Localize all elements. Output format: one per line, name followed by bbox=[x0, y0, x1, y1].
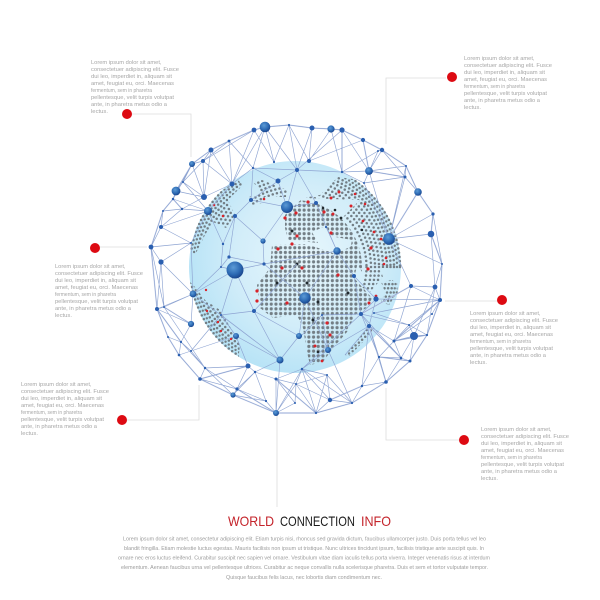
connector: top right bbox=[386, 78, 446, 144]
text block: middle right: pellentesque, velit turpis volutpat bbox=[470, 346, 553, 352]
network nodes: large spheres bbox=[172, 122, 422, 416]
body paragraph: Quisque faucibus felis lacus, nec lobortis diam condimentum nec. bbox=[226, 575, 382, 581]
text block: middle right: amet, feugiat eu, orci. Maecenas bbox=[470, 332, 553, 338]
text block: middle left: fermentum, sem in pharetra bbox=[55, 292, 117, 298]
text block: top left: ante, in pharetra metus odio a bbox=[91, 102, 168, 108]
network lines bbox=[151, 125, 442, 413]
text block: top left: pellentesque, velit turpis volutpat bbox=[91, 95, 174, 101]
connector: middle left bbox=[100, 246, 147, 248]
text block: middle left: dui leo, imperdiet in, aliquam sit bbox=[55, 278, 136, 284]
globe bbox=[189, 161, 401, 373]
title: WORLD bbox=[228, 513, 274, 529]
text block: top right: consectetuer adipiscing elit. Fusce bbox=[464, 63, 552, 69]
network lines: outer web underlay bbox=[151, 125, 442, 413]
body paragraph: ornare nec eros luctus eleifend. Curabitur suscipit nec sapien vel ornare. Vestibulum vitae diam iaculis tellus porta viverra. Integer venenatis risus at interdum bbox=[118, 556, 490, 562]
connector: top left bbox=[132, 114, 191, 157]
text block: middle right: dui leo, imperdiet in, aliquam sit bbox=[470, 325, 551, 331]
connector: bottom left bbox=[127, 385, 199, 420]
text block: middle right: ante, in pharetra metus odio a bbox=[470, 353, 547, 359]
connection network bbox=[149, 122, 443, 416]
text block: middle right: consectetuer adipiscing elit. Fusce bbox=[470, 318, 558, 324]
marker: middle right bbox=[497, 295, 507, 305]
text block: top right: Lorem ipsum dolor sit amet, bbox=[464, 56, 535, 62]
text block: bottom left: pellentesque, velit turpis volutpat bbox=[21, 417, 104, 423]
text block: top left: consectetuer adipiscing elit. Fusce bbox=[91, 67, 179, 73]
text block: middle left: Lorem ipsum dolor sit amet, bbox=[55, 264, 126, 270]
text block: bottom left: dui leo, imperdiet in, aliquam sit bbox=[21, 396, 102, 402]
text block: middle left bbox=[55, 264, 143, 319]
text block: top right: amet, feugiat eu, orci. Maecenas bbox=[464, 77, 547, 83]
text block: bottom left: Lorem ipsum dolor sit amet, bbox=[21, 382, 92, 388]
text block: bottom right: consectetuer adipiscing elit. Fusce bbox=[481, 434, 569, 440]
text block: bottom left: lectus. bbox=[21, 431, 38, 437]
text block: top right bbox=[464, 56, 552, 111]
text block: bottom right: pellentesque, velit turpis volutpat bbox=[481, 462, 564, 468]
text block: top left bbox=[91, 60, 179, 115]
body paragraph: Lorem ipsum dolor sit amet, consectetur adipiscing elit. Etiam turpis nisi, rhoncus sed gravida dictum, faucibus ullamcorper justo. Duis porta tellus vel leo bbox=[123, 536, 486, 542]
red map markers bbox=[205, 190, 387, 362]
text block: middle right: lectus. bbox=[470, 360, 487, 366]
text block: middle left: pellentesque, velit turpis volutpat bbox=[55, 299, 138, 305]
body paragraph: elementum. Aenean faucibus urna vel pellentesque ultrices. Curabitur ac neque convallis nulla scelerisque pharetra. Duis et sem et tortor vulputate tempor. bbox=[121, 565, 488, 571]
connector: middle right bbox=[445, 300, 497, 302]
text block: bottom left bbox=[21, 382, 109, 437]
connector: bottom right bbox=[386, 388, 459, 440]
text block: middle right bbox=[470, 311, 558, 366]
marker: top right bbox=[447, 72, 457, 82]
text block: bottom left: amet, feugiat eu, orci. Maecenas bbox=[21, 403, 104, 409]
connector: bottom centre bbox=[276, 416, 278, 507]
text block: middle left: lectus. bbox=[55, 313, 72, 319]
text block: bottom right: Lorem ipsum dolor sit amet, bbox=[481, 427, 552, 433]
title bbox=[228, 513, 391, 529]
text block: top left: lectus. bbox=[91, 109, 108, 115]
text block: middle right: Lorem ipsum dolor sit amet, bbox=[470, 311, 541, 317]
body paragraph bbox=[118, 536, 490, 581]
text block: top left: amet, feugiat eu, orci. Maecenas bbox=[91, 81, 174, 87]
text block: middle right: fermentum, sem in pharetra bbox=[470, 339, 532, 345]
world map dots bbox=[190, 162, 400, 372]
dark map markers bbox=[276, 207, 363, 353]
text block: top left: dui leo, imperdiet in, aliquam sit bbox=[91, 74, 172, 80]
text block: top right: lectus. bbox=[464, 105, 481, 111]
text block: top left: fermentum, sem in pharetra bbox=[91, 88, 153, 94]
text block: bottom right: lectus. bbox=[481, 476, 498, 482]
marker: top left bbox=[122, 109, 132, 119]
marker: bottom right bbox=[459, 435, 469, 445]
text block: top right: dui leo, imperdiet in, aliquam sit bbox=[464, 70, 545, 76]
title: CONNECTION bbox=[280, 513, 355, 529]
text block: top right: fermentum, sem in pharetra bbox=[464, 84, 526, 90]
text block: bottom right: dui leo, imperdiet in, aliquam sit bbox=[481, 441, 562, 447]
marker: bottom left bbox=[117, 415, 127, 425]
text block: bottom right: ante, in pharetra metus odio a bbox=[481, 469, 558, 475]
text block: bottom left: fermentum, sem in pharetra bbox=[21, 410, 83, 416]
text block: bottom left: ante, in pharetra metus odio a bbox=[21, 424, 98, 430]
text block: top right: pellentesque, velit turpis volutpat bbox=[464, 91, 547, 97]
network nodes: small bbox=[149, 124, 443, 414]
text block: bottom right: fermentum, sem in pharetra bbox=[481, 455, 543, 461]
text block: bottom right: amet, feugiat eu, orci. Maecenas bbox=[481, 448, 564, 454]
text block: bottom right bbox=[481, 427, 569, 482]
body paragraph: blandit fringilla. Etiam molestie luctus egestas. Mauris facilisis non ipsum ut tristique. Nunc ultrices tincidunt ipsum, facilisis tristique ante suscipit quis. In bbox=[124, 546, 484, 552]
text block: middle left: ante, in pharetra metus odio a bbox=[55, 306, 132, 312]
text block: top left: Lorem ipsum dolor sit amet, bbox=[91, 60, 162, 66]
marker: middle left bbox=[90, 243, 100, 253]
title: INFO bbox=[361, 513, 391, 529]
text block: middle left: amet, feugiat eu, orci. Maecenas bbox=[55, 285, 138, 291]
text block: top right: ante, in pharetra metus odio a bbox=[464, 98, 541, 104]
text block: bottom left: consectetuer adipiscing elit. Fusce bbox=[21, 389, 109, 395]
text block: middle left: consectetuer adipiscing elit. Fusce bbox=[55, 271, 143, 277]
